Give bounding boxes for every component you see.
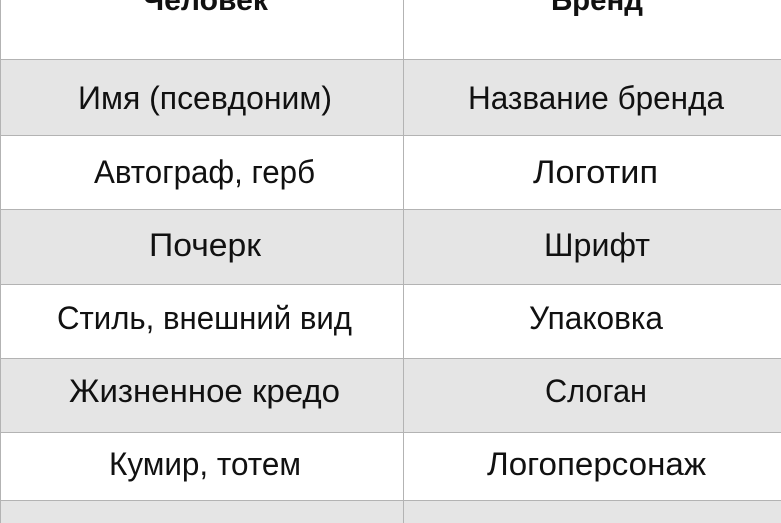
row 1 left: Имя (псевдоним): [78, 80, 332, 116]
row 2 right: Логотип: [533, 154, 658, 190]
row 6 right: Логоперсонаж: [487, 446, 707, 482]
row 4 right: Упаковка: [529, 300, 663, 336]
row 2 left: Автограф, герб: [94, 154, 315, 190]
row 6 left: Кумир, тотем: [109, 446, 301, 482]
row 1 right: Название бренда: [468, 80, 724, 116]
row 4 left: Стиль, внешний вид: [57, 300, 352, 336]
row 5 left: Жизненное кредо: [69, 373, 340, 409]
row 5 right: Слоган: [545, 373, 647, 409]
row 3 left: Почерк: [149, 227, 262, 263]
row 3 right: Шрифт: [544, 227, 650, 263]
